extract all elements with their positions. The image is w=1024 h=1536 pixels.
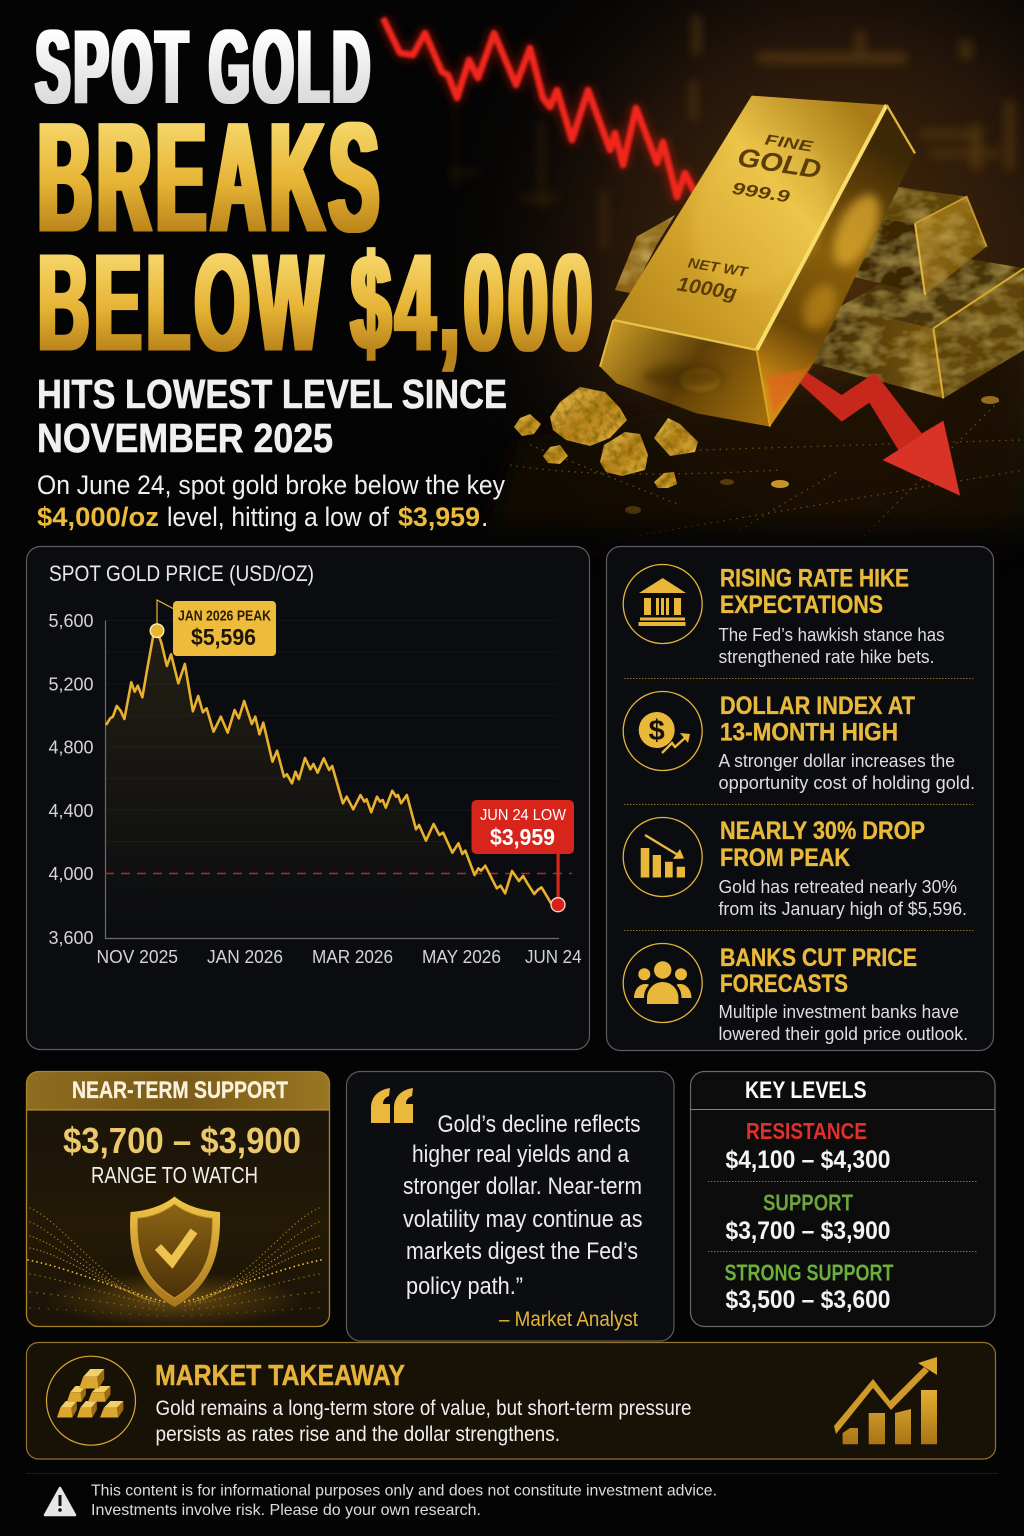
intro text: $3,959 [398,502,480,532]
intro text: level, hitting a low of [167,502,390,532]
quote text: Gold’s decline reflects [438,1111,640,1138]
icon: rising chart [834,1357,937,1444]
y axis labels: 4,800 [48,736,94,758]
subheading: HITS LOWEST LEVEL SINCE [37,371,507,417]
disclaimer text [91,1483,717,1519]
driver: drop from peak [623,817,967,919]
driver text: Gold has retreated nearly 30% [718,876,957,897]
driver heading: 13-MONTH HIGH [720,719,898,747]
quote text: higher real yields and a [412,1141,630,1168]
quote text: policy path.” [406,1273,523,1300]
headline: BREAKS [38,91,384,265]
driver text [718,624,944,667]
back left bar [615,215,675,293]
level: resistance: RESISTANCE [746,1118,867,1144]
icon: people [623,944,702,1022]
key levels title: KEY LEVELS [745,1077,866,1104]
driver heading [720,565,909,619]
icon: quotation mark [371,1088,413,1123]
driver text [718,876,967,919]
driver: rate hike [623,564,944,667]
gold bar engraving: FINE [764,131,815,156]
chart title: SPOT GOLD PRICE (USD/OZ) [49,561,314,586]
lower bar [813,258,1024,398]
price line [106,630,558,938]
driver text: The Fed’s hawkish stance has [718,624,944,645]
level: strong support [724,1260,894,1314]
level: support: $3,700 – $3,900 [726,1217,890,1245]
peak callout: $5,596 [191,624,256,650]
4000 reference line [105,872,572,874]
dotted gold waves [28,1208,321,1328]
disclaimer text: Investments involve risk. Please do your own research. [91,1502,481,1519]
quote text [403,1111,642,1300]
driver heading: BANKS CUT PRICE [720,944,917,972]
driver: dollar index [623,692,975,793]
support range value: $3,700 – $3,900 [63,1120,301,1161]
gold bar engraving: NET WT [687,254,750,280]
icon: falling bars [623,818,702,896]
icon: bank [623,564,702,644]
y axis labels: 5,600 [48,610,94,631]
disclaimer text: This content is for informational purposes only and does not constitute investment advice. [91,1483,717,1500]
headline [36,10,596,380]
floor [480,340,1024,545]
subheading: NOVEMBER 2025 [37,415,333,461]
gold bar engraving: GOLD [736,142,823,185]
hero image: gold bars over falling market [380,0,1024,547]
gold bar engraving: 999.9 [731,179,792,207]
y axis labels: 3,600 [48,927,94,948]
driver text: Multiple investment banks have [718,1001,959,1022]
driver text: strengthened rate hike bets. [718,646,934,667]
icon: shield [130,1196,220,1307]
icon: warning [45,1488,75,1515]
red arrow [800,370,960,496]
driver heading: FROM PEAK [720,844,850,872]
panel: key levels [690,1072,995,1326]
upper bar [853,187,987,295]
quote text: stronger dollar. Near-term [403,1173,642,1200]
y axis labels: 4,400 [48,800,94,821]
panel: near-term support [26,1072,330,1328]
intro text: . [481,502,488,532]
driver heading [720,817,925,872]
gold bar engraving: 1000g [676,274,738,305]
quote text: markets digest the Fed’s [406,1238,638,1265]
driver text [718,750,975,793]
low callout: $3,959 [490,824,555,850]
low callout: JUN 24 LOW [480,807,567,824]
support header band: NEAR-TERM SUPPORT [72,1077,288,1104]
driver text: A stronger dollar increases the [718,750,955,771]
x axis labels: MAR 2026 [312,946,393,967]
driver heading: EXPECTATIONS [720,591,883,619]
icon: gold bar stack [46,1356,136,1445]
x axis labels: JAN 2026 [207,946,283,967]
driver heading: FORECASTS [720,970,848,998]
y axis labels: 4,000 [48,863,94,884]
level: support [726,1190,890,1245]
support range caption: RANGE TO WATCH [91,1162,258,1188]
level: support: SUPPORT [763,1190,854,1216]
headline line: spot gold: SPOT GOLD [36,10,374,126]
disclaimer [45,1483,717,1519]
icon: dollar [623,692,702,770]
driver heading: NEARLY 30% DROP [720,817,925,845]
y axis labels [48,610,94,948]
peak callout: JAN 2026 PEAK [178,609,271,625]
panel: market takeaway [26,1342,996,1459]
panel: analyst quote [346,1072,674,1341]
driver heading: RISING RATE HIKE [720,565,909,593]
y axis labels: 5,200 [48,674,94,694]
driver text [718,1001,968,1044]
peak callout [150,600,276,656]
takeaway text [156,1397,692,1446]
driver text: opportunity cost of holding gold. [718,772,975,793]
x axis labels: NOV 2025 [96,946,178,967]
driver heading: DOLLAR INDEX AT [720,692,915,720]
main bar right face [757,105,915,427]
intro text [37,470,506,532]
level: resistance: $4,100 – $4,300 [726,1146,890,1174]
quote text: volatility may continue as [403,1206,642,1233]
icon: dollar: $ [649,715,665,747]
intro text: On June 24, spot gold broke below the key [37,470,506,500]
driver heading [720,692,915,747]
panel: price chart [26,546,590,1050]
intro text: $4,000/oz [37,502,159,532]
low callout [472,800,574,912]
x axis labels [96,946,582,967]
red falling line [383,18,695,197]
main bar top face [613,96,887,350]
takeaway heading: MARKET TAKEAWAY [155,1360,405,1392]
level: strong support: STRONG SUPPORT [724,1260,894,1286]
level: resistance [726,1118,890,1174]
subheading [37,371,507,461]
main bar front face [600,320,770,427]
x axis labels: MAY 2026 [422,946,501,967]
driver heading [720,944,917,998]
takeaway text: Gold remains a long-term store of value, but short-term pressure [156,1397,692,1420]
level: strong support: $3,500 – $3,600 [726,1286,890,1314]
panel: drivers [606,546,994,1050]
gold bar engraving [676,131,823,305]
driver text: lowered their gold price outlook. [718,1023,968,1044]
takeaway text: persists as rates rise and the dollar strengthens. [156,1423,560,1446]
driver: banks [623,944,968,1044]
x axis labels: JUN 24 [525,946,582,967]
gold nuggets [514,387,698,488]
quote attribution: – Market Analyst [499,1308,638,1331]
support header band [26,1072,330,1110]
driver text: from its January high of $5,596. [718,898,967,919]
